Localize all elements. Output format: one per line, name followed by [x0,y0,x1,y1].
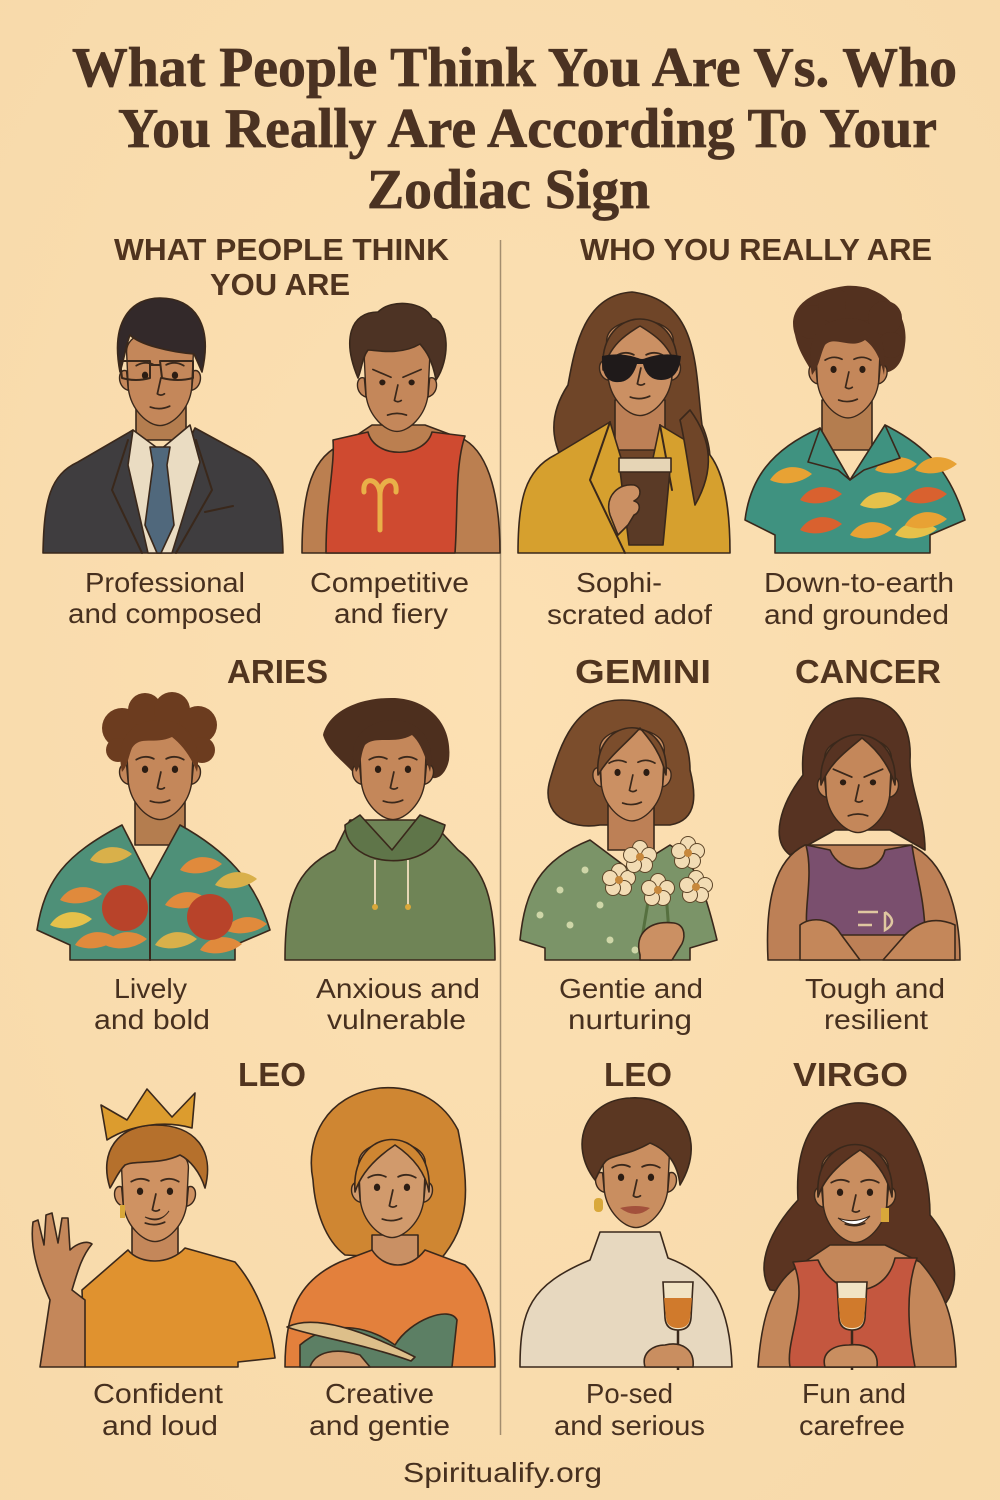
portrait: anxious person in green hoodie [285,698,495,960]
portrait: tough woman with crossed arms [767,698,960,960]
portrait: confident man with crown and raised hand [32,1089,275,1367]
heading: what people think you are: YOU ARE [210,267,350,302]
heading: Aries: ARIES [227,653,328,690]
caption [93,1378,223,1441]
caption [764,567,954,630]
portrait: creative person with orange hair and sketchbook [285,1088,495,1367]
caption: and bold [94,1004,210,1035]
caption: Anxious and [316,973,480,1004]
caption [559,973,703,1035]
title: You Really Are According To Your [118,98,937,160]
caption: Sophi- [576,567,662,598]
portrait: fun woman with curly hair and wine [758,1103,956,1370]
caption [309,1378,450,1441]
caption [68,567,262,629]
caption: and grounded [764,599,949,630]
portrait: gentle woman with flowers [520,700,717,960]
heading: Leo left: LEO [238,1056,306,1093]
caption: and gentie [309,1410,450,1441]
caption: Fun and [802,1378,906,1409]
caption [547,567,712,630]
caption: Tough and [805,973,945,1004]
caption: and serious [554,1410,705,1441]
caption: Creative [325,1378,434,1409]
caption: and fiery [334,598,448,629]
caption [316,973,480,1035]
caption: Professional [85,567,245,598]
portrait: lively man in floral shirt [37,692,270,960]
title [72,37,957,221]
footer: source: Spiritualify.org [403,1457,602,1488]
caption: and composed [68,598,262,629]
portrait: professional man in suit [43,298,283,553]
caption: Down-to-earth [764,567,954,598]
caption: Gentie and [559,973,703,1004]
heading: what people think you are [114,232,450,302]
heading: what people think you are: WHAT PEOPLE THINK [114,232,450,267]
title: What People Think You Are Vs. Who [72,37,957,99]
caption [799,1378,906,1441]
portrait: down-to-earth man in tropical shirt [745,286,965,553]
portrait: poised woman in turtleneck with wine [520,1098,732,1370]
heading: who you really are: WHO YOU REALLY ARE [580,232,932,267]
caption: Lively [114,973,187,1004]
title: Zodiac Sign [367,159,650,221]
portrait: competitive man in Aries tank [302,303,500,553]
caption: vulnerable [327,1004,466,1035]
caption: and loud [102,1410,218,1441]
caption: Confident [93,1378,223,1409]
caption [805,973,945,1035]
heading: Gemini: GEMINI [575,653,711,690]
caption: resilient [824,1004,928,1035]
caption: Competitive [310,567,469,598]
portrait: sophisticated woman with sunglasses and coffee [518,292,730,553]
caption: Po-sed [586,1378,673,1409]
caption [554,1378,705,1441]
caption: nurturing [568,1004,692,1035]
caption: carefree [799,1410,905,1441]
caption: scrated adof [547,599,712,630]
heading: Cancer: CANCER [795,653,941,690]
heading: Leo right: LEO [604,1056,672,1093]
heading: Virgo: VIRGO [793,1056,908,1093]
caption [310,567,469,629]
caption [94,973,210,1035]
